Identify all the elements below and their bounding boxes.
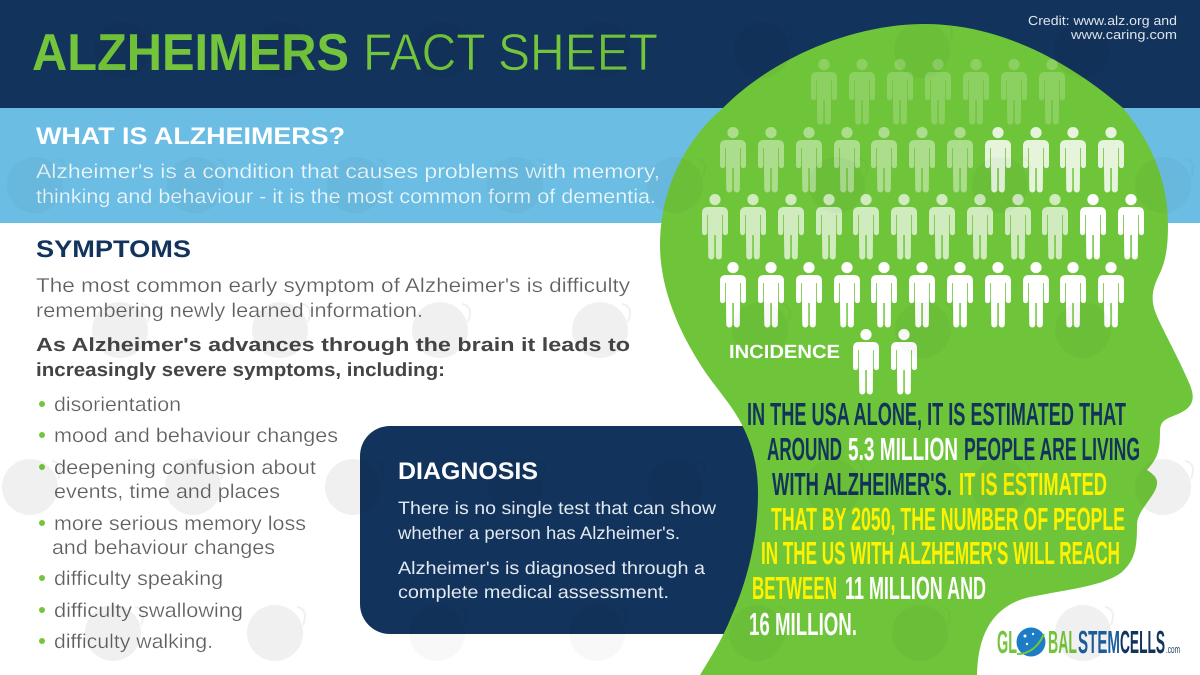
credit: Credit: www.alz.org and [1028, 13, 1177, 28]
symptoms intro [36, 275, 630, 322]
symptoms list: difficulty swallowing [54, 600, 243, 622]
statistic statement: 5.3 MILLION [848, 431, 958, 467]
symptoms list: deepening confusion about [54, 457, 316, 479]
row 2 light [985, 127, 1124, 192]
diagnosis text: complete medical assessment. [398, 582, 669, 602]
credit: www.caring.com [1070, 27, 1177, 42]
logo: global stem cells: .com [1166, 644, 1180, 656]
logo: global stem cells: BAL [1048, 624, 1077, 660]
row 1 [811, 59, 1065, 124]
statistic statement: AROUND [767, 431, 842, 467]
diagnosis text: whether a person has Alzheimer's. [397, 523, 680, 543]
symptoms list [39, 394, 338, 653]
symptoms heading: SYMPTOMS [36, 236, 191, 263]
diagnosis text: Alzheimer's is diagnosed through a [398, 558, 706, 578]
what is alzheimers text: thinking and behaviour - it is the most common form of dementia. [36, 186, 656, 208]
diagnosis text [397, 498, 717, 602]
row 5 [853, 329, 917, 394]
header band [0, 0, 1200, 108]
pictogram: incidence people [702, 59, 1144, 394]
watermark globes on white [2, 302, 1193, 661]
symptoms list: more serious memory loss [54, 513, 306, 535]
row 2 faded [720, 127, 973, 192]
title [32, 24, 658, 82]
symptoms list: difficulty walking. [54, 631, 213, 653]
what is band [0, 108, 1200, 223]
symptoms list: and behaviour changes [52, 537, 275, 559]
logo: global stem cells: GL [997, 624, 1017, 660]
what is alzheimers heading: WHAT IS ALZHEIMERS? [36, 123, 345, 150]
credit [1028, 13, 1177, 42]
symptoms bold statement: increasingly severe symptoms, including: [36, 360, 445, 381]
statistic statement: WITH ALZHEIMER'S. [772, 466, 952, 502]
symptoms list: disorientation [54, 394, 181, 416]
symptoms list: events, time and places [54, 481, 280, 503]
row 3 light [702, 194, 1068, 260]
statistic statement: 16 MILLION. [749, 606, 857, 642]
title: ALZHEIMERS [32, 24, 349, 82]
incidence label: INCIDENCE [729, 342, 840, 363]
diagnosis heading: DIAGNOSIS [398, 458, 538, 485]
diagnosis text: There is no single test that can show [398, 498, 717, 518]
row 3 solid [1080, 194, 1144, 260]
symptoms bold statement [36, 335, 630, 381]
title: FACT SHEET [363, 24, 658, 82]
logo: global stem cells [997, 624, 1180, 660]
row 4 [720, 262, 1124, 328]
statistic statement: 11 MILLION AND [845, 570, 986, 606]
statistic statement: BETWEEN [752, 570, 837, 606]
symptoms intro: remembering newly learned information. [36, 300, 423, 322]
symptoms bold statement: As Alzheimer's advances through the brain it leads to [36, 335, 630, 356]
symptoms list: difficulty speaking [54, 568, 223, 590]
logo: global stem cells: STEM [1078, 624, 1120, 660]
head silhouette [660, 24, 1193, 675]
symptoms intro: The most common early symptom of Alzheimer's is difficulty [36, 275, 630, 297]
statistic statement [747, 396, 1140, 642]
what is alzheimers text [36, 161, 660, 208]
symptoms list: mood and behaviour changes [54, 425, 338, 447]
what is alzheimers text: Alzheimer's is a condition that causes problems with memory, [36, 161, 660, 183]
panel: diagnosis [360, 426, 780, 634]
icon: globe [1016, 628, 1046, 656]
